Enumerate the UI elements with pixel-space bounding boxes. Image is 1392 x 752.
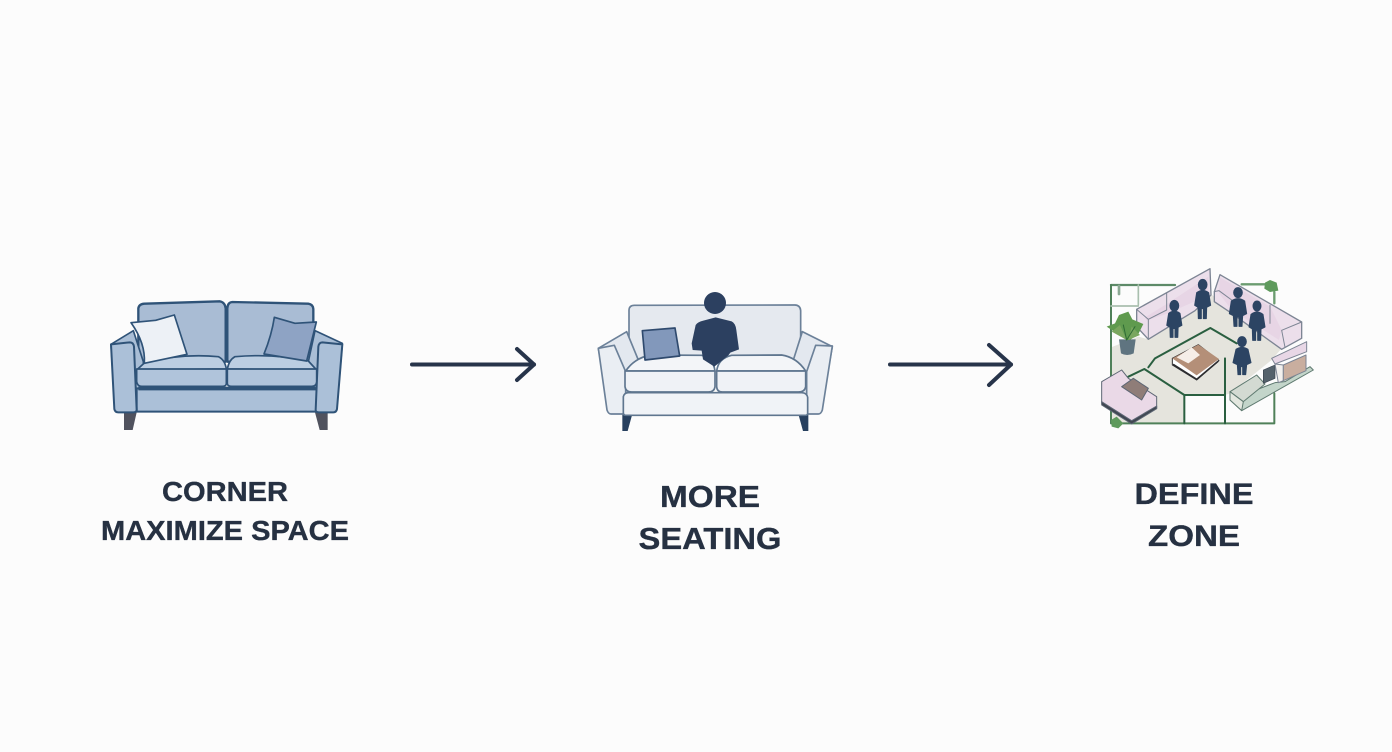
person 3 [1229,288,1247,326]
icon: blue corner sofa [111,301,342,430]
person 2 [1167,300,1182,337]
label: more seating [638,479,782,556]
icon: zoned living room floor plan [1102,269,1313,428]
plant [1107,312,1143,355]
label: define zone: ZONE [1148,520,1240,553]
label: corner maximize space [101,476,349,546]
sofa: upper left section [1137,269,1211,339]
arrow 1 [412,349,534,380]
icon: blue pillow [264,317,316,361]
screen [1263,365,1275,383]
people silhouettes [1167,279,1265,375]
label: corner maximize space: CORNER [162,476,288,507]
icon: pillow [642,328,680,360]
icon: seated person [692,292,739,367]
icon: white pillow [131,315,187,363]
person 4 [1249,301,1265,340]
person 1 [1195,279,1211,319]
label: more seating: MORE [660,479,760,514]
label: define zone: DEFINE [1134,478,1254,511]
icon: white sofa with person [598,292,832,431]
sofa: right end [1272,342,1307,383]
label: define zone [1134,478,1254,553]
coffee table [1172,345,1219,380]
zone boundaries [1128,328,1237,423]
arrow 2 [890,345,1011,385]
person 5 [1233,337,1251,375]
console table [1230,367,1313,411]
floor plan walls [1111,284,1274,423]
label: corner maximize space: MAXIMIZE SPACE [101,515,349,546]
floor [1111,293,1282,423]
green corner accents [1264,280,1278,292]
sofa: lower left chair [1102,370,1157,424]
label: more seating: SEATING [638,521,782,556]
sofa: upper right section [1214,275,1302,349]
